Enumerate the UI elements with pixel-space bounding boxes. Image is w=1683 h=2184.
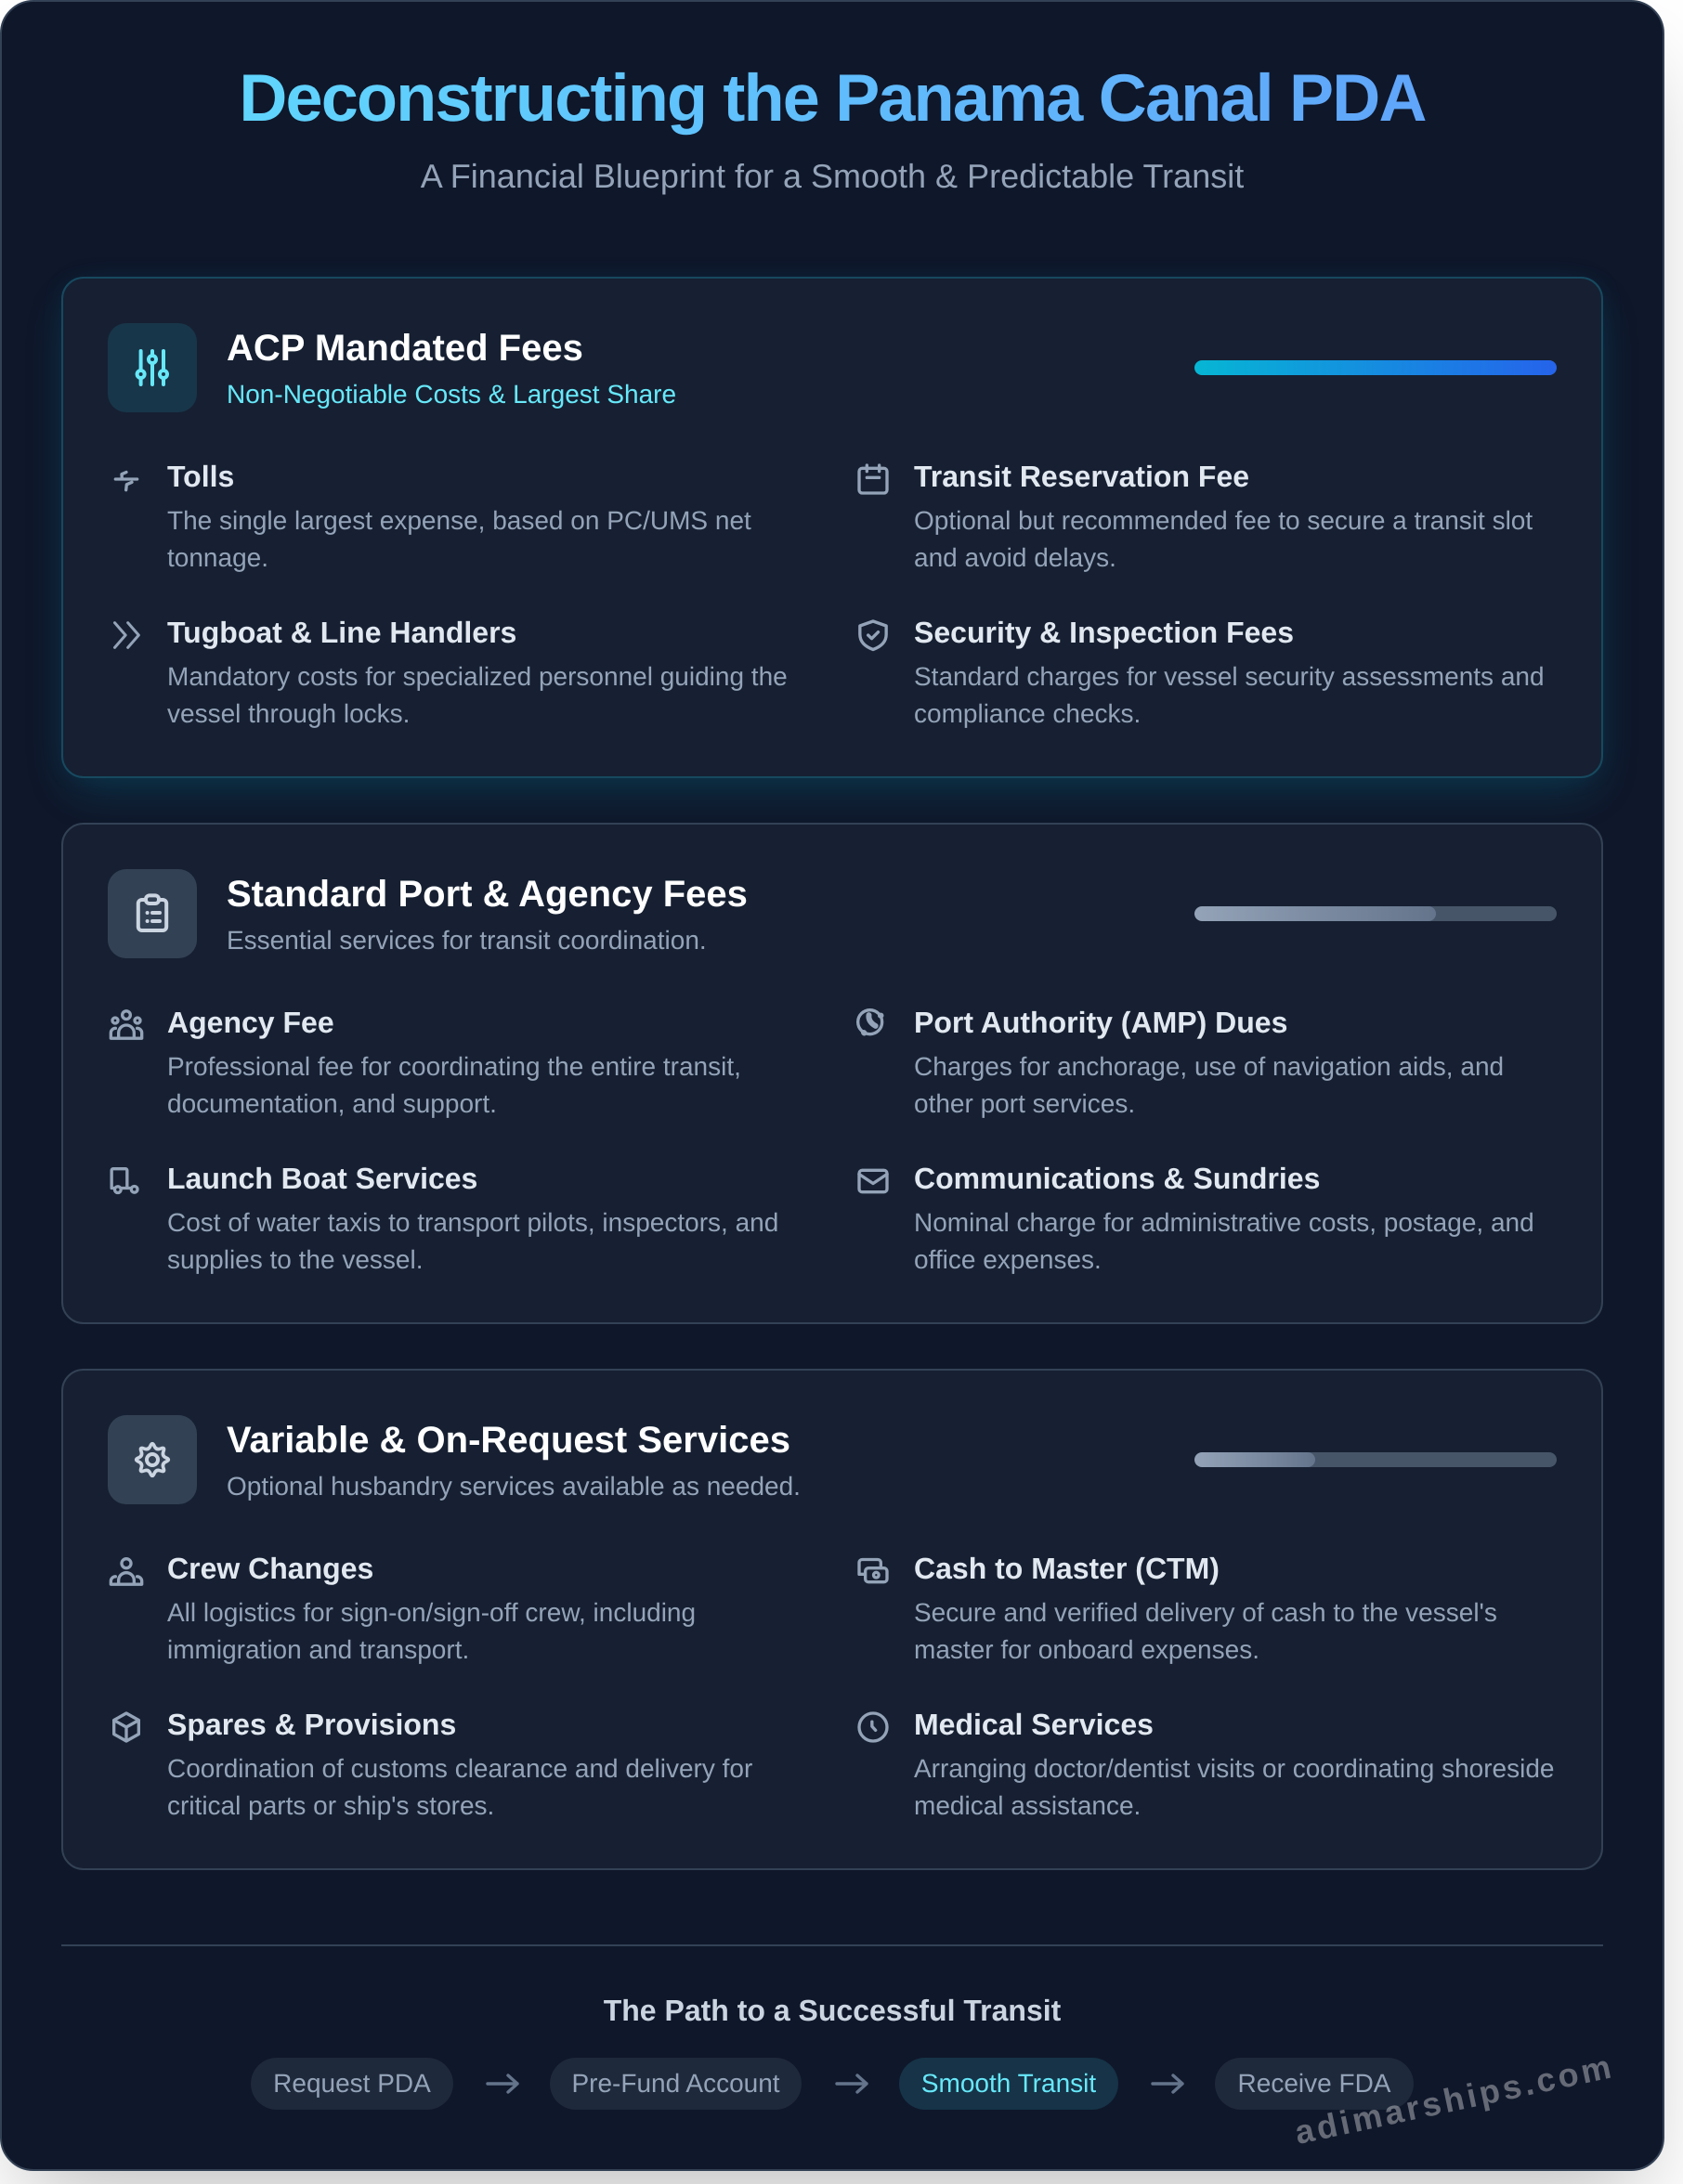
item: Tolls — [113, 460, 751, 572]
item: Medical Services — [857, 1708, 1554, 1820]
item: Agency Fee — [110, 1006, 741, 1118]
share bar — [1194, 906, 1557, 921]
item: Crew Changes: All logistics for sign-on/sign-off crew, including — [167, 1598, 696, 1627]
item: Tugboat & Line Handlers: Tugboat & Line Handlers — [167, 616, 516, 649]
item: Communications & Sundries: Communications & Sundries — [914, 1162, 1320, 1195]
step: Smooth Transit — [899, 2058, 1118, 2110]
item: Spares & Provisions: Spares & Provisions — [167, 1708, 456, 1741]
item: Tolls: The single largest expense, based on PC/UMS net — [167, 506, 751, 535]
item: Transit Reservation Fee: Optional but recommended fee to secure a transit slot — [914, 506, 1533, 535]
item: Cash to Master (CTM): Secure and verified delivery of cash to the vessel's — [914, 1598, 1497, 1627]
step: Smooth Transit: Smooth Transit — [921, 2069, 1096, 2098]
step: Receive FDA — [1215, 2058, 1414, 2110]
item: Security & Inspection Fees: Security & Inspection Fees — [914, 616, 1294, 649]
item: Medical Services: medical assistance. — [914, 1791, 1141, 1820]
title: Deconstructing the Panama Canal PDA — [239, 61, 1426, 136]
heading: Non-Negotiable Costs & Largest Share — [227, 380, 676, 409]
item: Security & Inspection Fees: compliance checks. — [914, 699, 1141, 728]
arrow — [835, 2074, 868, 2094]
item: Spares & Provisions: Coordination of customs clearance and delivery for — [167, 1754, 752, 1783]
item: Spares & Provisions — [111, 1708, 752, 1820]
share bar — [1194, 360, 1557, 375]
arrow — [486, 2074, 519, 2094]
item: Transit Reservation Fee: Transit Reservation Fee — [914, 460, 1249, 493]
item: Medical Services: Arranging doctor/dentist visits or coordinating shoreside — [914, 1754, 1554, 1783]
item: Communications & Sundries — [857, 1162, 1534, 1274]
watermark: adimarships.com — [1291, 2047, 1617, 2152]
heading — [227, 874, 748, 955]
item: Transit Reservation Fee: and avoid delays. — [914, 543, 1116, 572]
item: Security & Inspection Fees — [858, 616, 1545, 728]
item: Crew Changes: immigration and transport. — [167, 1635, 469, 1664]
item: Launch Boat Services — [110, 1162, 778, 1274]
heading — [227, 328, 676, 409]
item: Transit Reservation Fee — [857, 460, 1533, 572]
item: Cash to Master (CTM): Cash to Master (CTM) — [914, 1552, 1220, 1585]
heading: Standard Port & Agency Fees — [227, 874, 748, 915]
share bar — [1194, 1452, 1557, 1467]
subtitle: A Financial Blueprint for a Smooth & Predictable Transit — [421, 157, 1244, 195]
item: Cash to Master (CTM) — [857, 1552, 1497, 1664]
item: Port Authority (AMP) Dues: Charges for anchorage, use of navigation aids, and — [914, 1052, 1504, 1081]
panel: Standard Port & Agency Fees — [61, 823, 1603, 1324]
panel header — [108, 323, 1557, 412]
icon: sliders — [108, 323, 197, 412]
item: Crew Changes — [110, 1552, 696, 1664]
item: Tolls: Tolls — [167, 460, 234, 493]
heading — [227, 1420, 801, 1501]
panel header — [108, 869, 1557, 958]
heading: Variable & On-Request Services — [227, 1420, 790, 1461]
step: Pre-Fund Account: Pre-Fund Account — [571, 2069, 780, 2098]
panel: Variable & On-Request Services — [61, 1369, 1603, 1870]
panel header — [108, 1415, 1557, 1504]
item: Cash to Master (CTM): master for onboard expenses. — [914, 1635, 1259, 1664]
item: Security & Inspection Fees: Standard charges for vessel security assessments and — [914, 662, 1545, 691]
item: Launch Boat Services: supplies to the vessel. — [167, 1245, 424, 1274]
item: Launch Boat Services: Launch Boat Services — [167, 1162, 477, 1195]
fee items — [113, 460, 1545, 728]
item: Communications & Sundries: Nominal charge for administrative costs, postage, and — [914, 1208, 1534, 1237]
footer heading: The Path to a Successful Transit — [604, 1994, 1061, 2027]
step: Request PDA: Request PDA — [273, 2069, 431, 2098]
item: Tugboat & Line Handlers — [113, 616, 788, 728]
item: Launch Boat Services: Cost of water taxis to transport pilots, inspectors, and — [167, 1208, 778, 1237]
item: Crew Changes: Crew Changes — [167, 1552, 373, 1585]
arrow — [1151, 2074, 1184, 2094]
item: Agency Fee: documentation, and support. — [167, 1089, 497, 1118]
fee items — [110, 1552, 1554, 1820]
icon: clipboard — [108, 869, 197, 958]
item: Tugboat & Line Handlers: vessel through locks. — [167, 699, 410, 728]
item: Agency Fee: Agency Fee — [167, 1006, 334, 1039]
item: Agency Fee: Professional fee for coordinating the entire transit, — [167, 1052, 741, 1081]
fee items — [110, 1006, 1534, 1274]
step: Pre-Fund Account — [550, 2058, 802, 2110]
icon: gear — [108, 1415, 197, 1504]
step: Request PDA — [251, 2058, 453, 2110]
item: Port Authority (AMP) Dues: Port Authority (AMP) Dues — [914, 1006, 1287, 1039]
item: Tolls: tonnage. — [167, 543, 268, 572]
heading: ACP Mandated Fees — [227, 328, 583, 369]
item: Communications & Sundries: office expenses. — [914, 1245, 1102, 1274]
item: Medical Services: Medical Services — [914, 1708, 1154, 1741]
item: Spares & Provisions: critical parts or ship's stores. — [167, 1791, 494, 1820]
item: Port Authority (AMP) Dues: other port services. — [914, 1089, 1135, 1118]
heading: Optional husbandry services available as needed. — [227, 1472, 801, 1501]
step: Receive FDA: Receive FDA — [1238, 2069, 1390, 2098]
item: Tugboat & Line Handlers: Mandatory costs for specialized personnel guiding the — [167, 662, 788, 691]
heading: Essential services for transit coordination. — [227, 926, 707, 955]
item: Port Authority (AMP) Dues — [856, 1006, 1504, 1118]
panel: ACP Mandated Fees — [61, 277, 1603, 778]
